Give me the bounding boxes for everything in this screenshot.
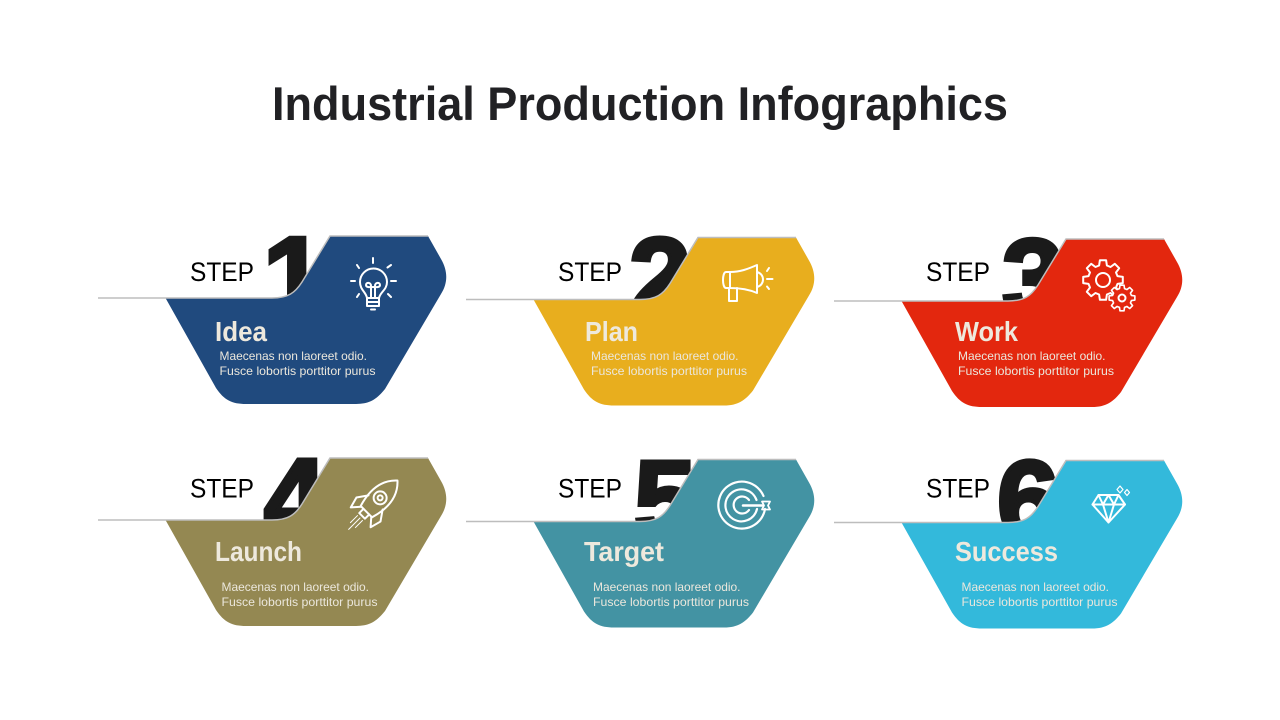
heading: plan: Plan: [585, 316, 638, 347]
description 5: Maecenas non laoreet odio.: [593, 580, 740, 594]
description 4: Maecenas non laoreet odio.: [222, 580, 369, 594]
card shape 1: [166, 236, 446, 404]
panel: step 2 plan: [466, 236, 814, 406]
card shape 3: [902, 239, 1182, 407]
step number 1: 1: [263, 214, 325, 339]
step label 1: STEP: [190, 257, 254, 287]
heading: target: Target: [584, 536, 664, 567]
panel: step 1 idea: [98, 235, 446, 404]
icon: megaphone: [723, 265, 772, 301]
panel: step 3 work: [834, 236, 1182, 407]
card shape 4: [166, 458, 446, 626]
card shape 2: [534, 238, 814, 406]
heading: idea: Idea: [215, 316, 267, 347]
edge line 1: [98, 236, 428, 298]
title: Industrial Production Infographics: [272, 77, 1008, 130]
edge line 3: [834, 239, 1164, 301]
description 3: Maecenas non laoreet odio.: [958, 349, 1106, 363]
panel: step 5 target: [466, 458, 814, 628]
description 6: Fusce lobortis porttitor purus: [962, 595, 1118, 609]
step label 2: STEP: [558, 257, 622, 287]
card shape 5: [534, 460, 814, 628]
step number 6: 6: [997, 438, 1059, 563]
description 2: Maecenas non laoreet odio.: [591, 349, 738, 363]
step label 4: STEP: [190, 474, 254, 504]
icon: rocket: [337, 469, 409, 541]
card shape 6: [902, 460, 1182, 628]
step label 3: STEP: [926, 257, 990, 287]
step label 6: STEP: [926, 474, 990, 504]
description 4: Fusce lobortis porttitor purus: [222, 595, 378, 609]
icon: light bulb: [351, 258, 396, 310]
step number 2: 2: [629, 215, 691, 340]
edge line 2: [466, 238, 796, 300]
panel: step 4 launch: [98, 457, 446, 626]
step number 4: 4: [264, 436, 326, 561]
description 3: Fusce lobortis porttitor purus: [958, 364, 1114, 378]
heading: work: Work: [955, 316, 1018, 347]
step number 3: 3: [1002, 216, 1064, 341]
heading: launch: Launch: [215, 536, 302, 567]
step number 5: 5: [634, 438, 696, 563]
description 1: Maecenas non laoreet odio.: [220, 349, 367, 363]
heading: success: Success: [955, 536, 1058, 567]
edge line 5: [466, 460, 796, 522]
description 2: Fusce lobortis porttitor purus: [591, 364, 747, 378]
description 1: Fusce lobortis porttitor purus: [220, 364, 376, 378]
icon: gears: [1083, 260, 1135, 311]
edge line 6: [834, 460, 1164, 522]
icon: diamond: [1092, 486, 1130, 522]
panel: step 6 success: [834, 458, 1182, 628]
description 5: Fusce lobortis porttitor purus: [593, 595, 749, 609]
step label 5: STEP: [558, 474, 622, 504]
description 6: Maecenas non laoreet odio.: [962, 580, 1109, 594]
icon: target: [718, 482, 770, 529]
edge line 4: [98, 458, 428, 520]
